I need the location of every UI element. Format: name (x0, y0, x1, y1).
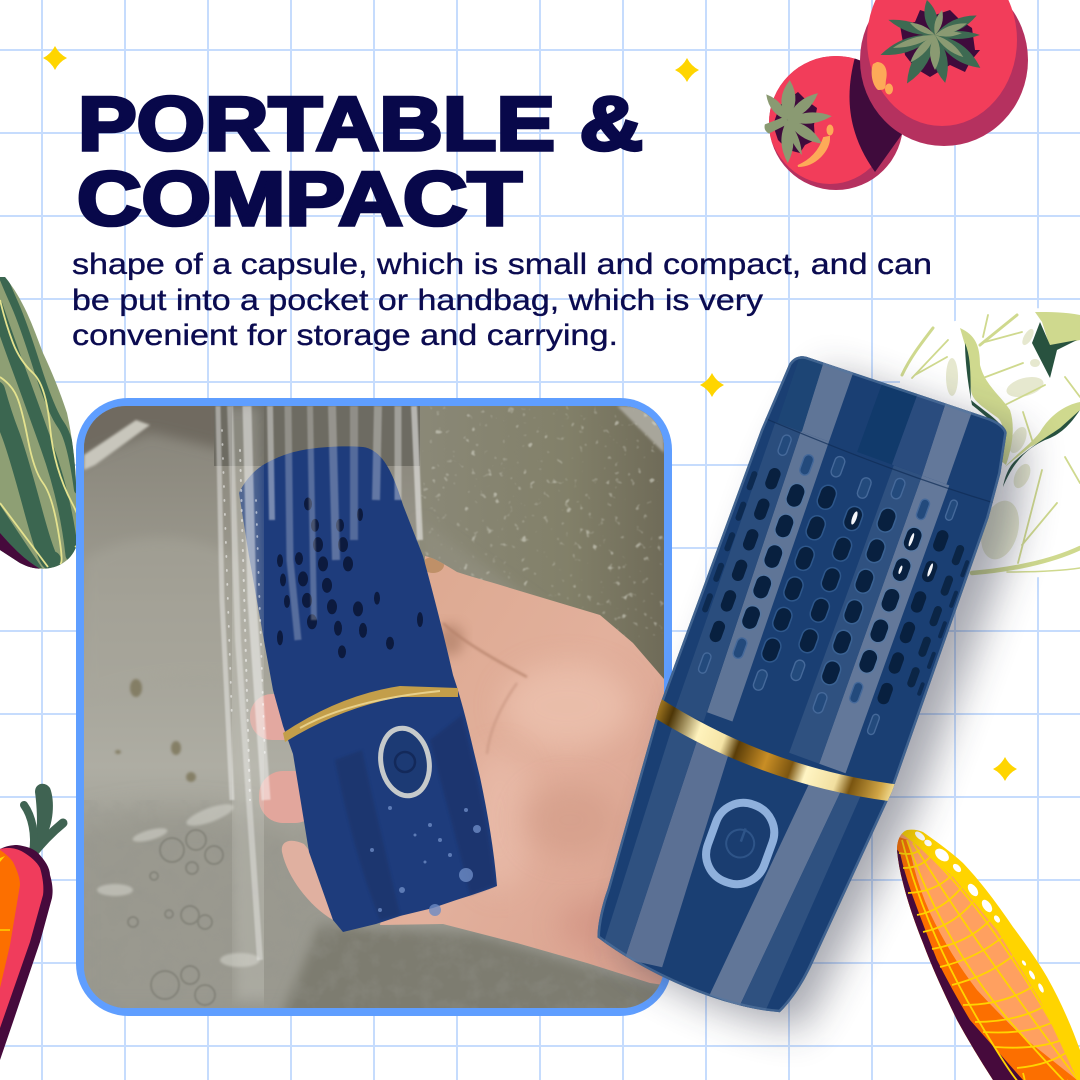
icon: yellow sparkle middle (700, 373, 724, 397)
icon: yellow sparkle top centre (675, 58, 699, 82)
edge rim highlight (598, 356, 1007, 1012)
finger two (259, 771, 304, 823)
light showing through holes (851, 511, 933, 577)
icon: yellow sparkle top left (43, 46, 67, 70)
title (77, 82, 643, 242)
product: blue capsule washer (597, 356, 1007, 1012)
title: COMPACT (77, 157, 522, 242)
body text: be put into a pocket or handbag, which is very (72, 284, 763, 317)
illustration: white cabbage right (900, 308, 1080, 578)
capsule in the photo (239, 446, 497, 932)
icon: yellow sparkle right (993, 757, 1017, 781)
perforated holes (696, 468, 973, 712)
body text (72, 248, 932, 352)
gold band (656, 700, 895, 801)
running water streaks (218, 406, 420, 1000)
product: capsule shadow (596, 362, 1048, 1047)
finger one (250, 694, 285, 740)
illustration: carrot left (0, 784, 63, 1060)
body text: shape of a capsule, which is small and compact, and can (72, 248, 932, 281)
panel frame (76, 398, 672, 1016)
illustration: tomatoes (762, 0, 1028, 190)
small vent slits (697, 434, 960, 735)
stripes (604, 356, 972, 1008)
finger three (282, 840, 333, 920)
title: PORTABLE & (78, 82, 643, 167)
power button (698, 795, 782, 892)
illustration: corn cob bottom right (890, 825, 1080, 1080)
panel: photo of capsule being washed under tap (70, 395, 672, 1020)
body text: convenient for storage and carrying. (72, 319, 618, 352)
illustration: striped squash left (0, 277, 76, 569)
hand holding the capsule (250, 556, 664, 985)
sink background (70, 395, 664, 1020)
